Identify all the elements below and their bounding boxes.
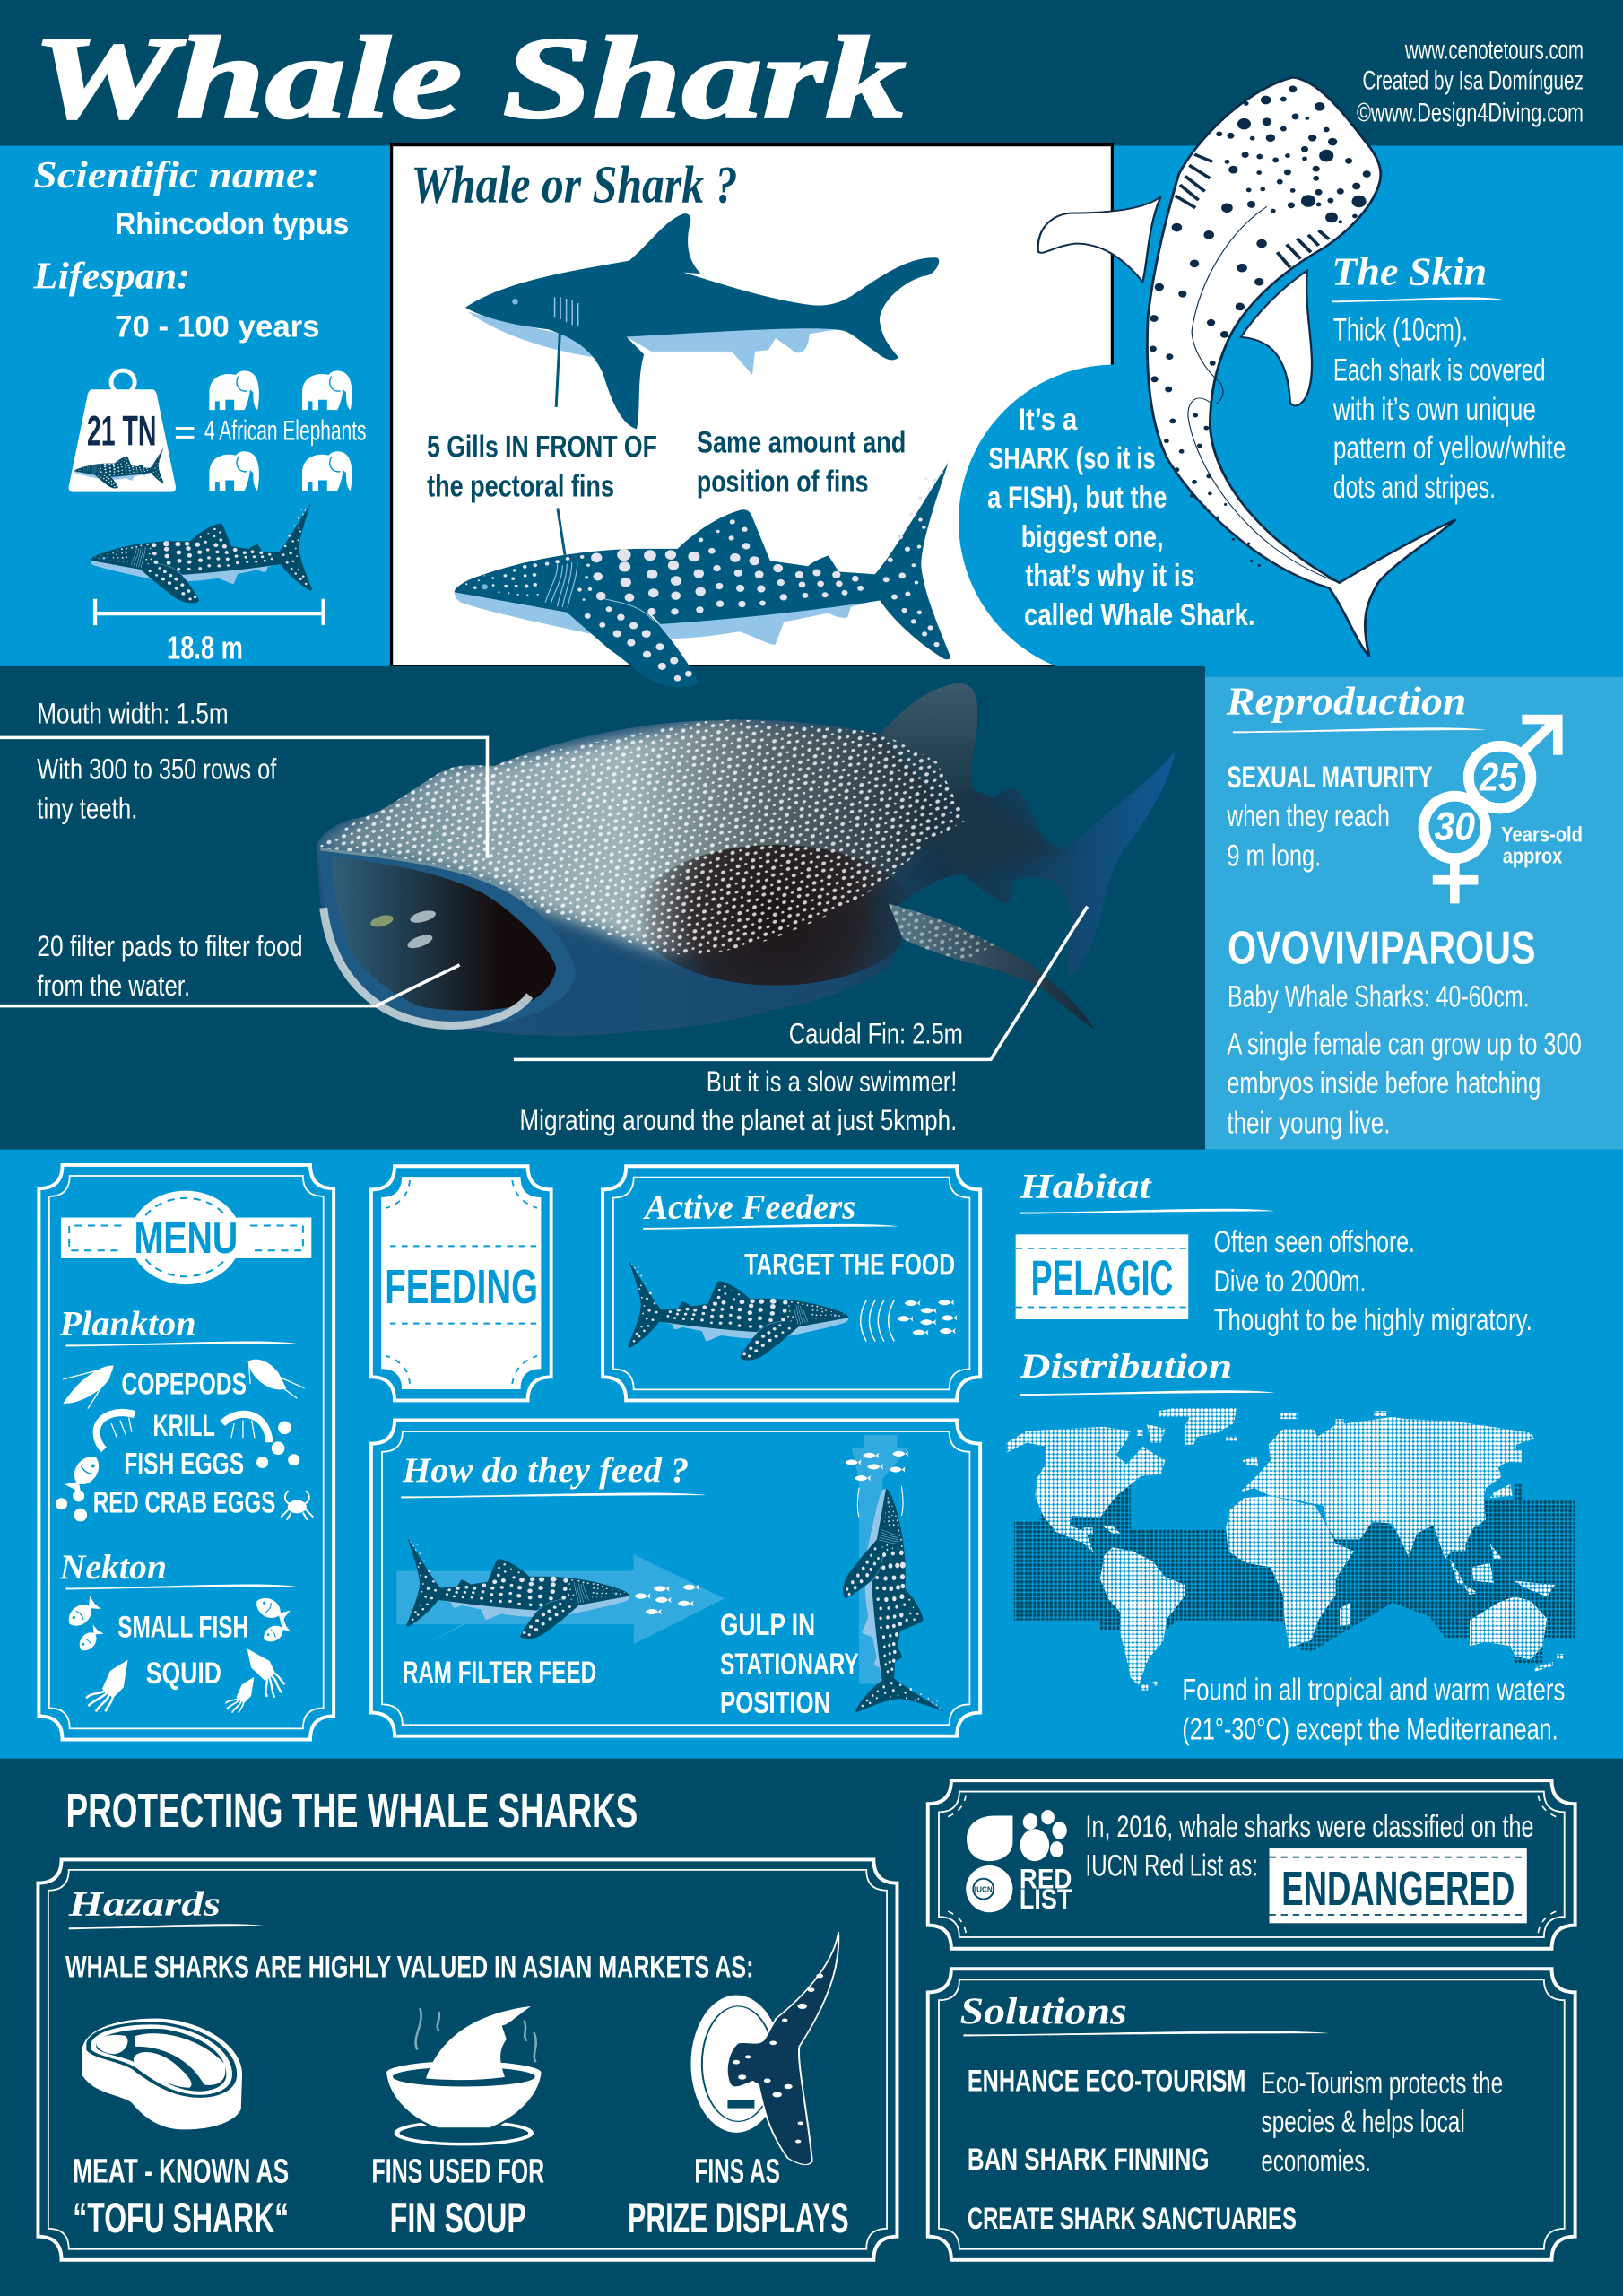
illustration: whale shark [455,463,950,687]
illustration: typical shark [465,213,939,429]
callout: caudal fin: Migrating around the planet at just 5kmph. [519,1103,957,1136]
underline [1020,1209,1275,1214]
solutions list: CREATE SHARK SANCTUARIES [968,2202,1297,2236]
length value: 18.8 m [167,630,243,666]
text block: the skin [1332,250,1566,505]
callout: filter pads: 20 filter pads to filter food [37,929,303,962]
middle blue background [0,1150,1623,1759]
label: TARGET THE FOOD [744,1248,955,1282]
frame [603,1166,980,1400]
heading: Solutions [959,1990,1127,2032]
text block: the skin: The Skin [1332,250,1487,294]
frame [371,1421,980,1736]
panel: menu [39,1165,334,1740]
icon: krill [97,1413,269,1449]
callout: caudal fin: Caudal Fin: 2.5m [789,1017,963,1050]
habitat text: Thought to be highly migratory. [1214,1303,1532,1337]
equals sign [176,429,194,437]
panel: distribution [1007,1347,1575,1747]
panel: hazards [38,1859,897,2260]
callout: it's a shark: SHARK (so it is [988,441,1156,475]
frame [928,1969,1575,2260]
age note: approx [1503,845,1562,868]
heading: Hazards [67,1885,221,1924]
icon: female symbol [1424,796,1486,903]
icon: male symbol: 25 [1479,756,1519,800]
icon: male symbol [1469,715,1563,808]
text block: the skin: dots and stripes. [1333,470,1496,505]
age note: Years-old [1501,823,1583,847]
ovoviviparous heading: OVOVIVIPAROUS [1228,922,1536,974]
heading: nekton: Nekton [59,1548,167,1587]
heading: Active Feeders [642,1187,855,1226]
logo: IUCN red list: IUCN [975,1885,993,1893]
arrow: gulp direction [852,1435,909,1684]
callout: filter pads [0,929,459,1006]
icon: meat [82,2019,242,2129]
panel: habitat [1016,1168,1532,1337]
underline [1020,1390,1275,1396]
panel: red list [928,1780,1575,1949]
icon: weight: 21 TN [87,407,156,455]
icon: elephants [209,370,352,491]
callout: filter pads: from the water. [37,969,190,1002]
lifespan value: 70 - 100 years [115,310,320,344]
frame [38,1859,897,2260]
panel: feeding label: FEEDING [385,1260,538,1314]
sexual maturity text: SEXUAL MATURITY [1227,761,1433,795]
label: fin soup: FIN SOUP [390,2195,526,2242]
underline [65,1342,297,1347]
plankton list: FISH EGGS [124,1448,244,1482]
arrow: gills bottom [558,509,565,555]
upper right strip [1205,666,1623,676]
habitat text [1214,1225,1532,1337]
underline [963,2031,1330,2036]
credits [1357,35,1584,128]
label: prize displays: PRIZE DISPLAYS [628,2195,849,2242]
heading: protecting: PROTECTING THE WHALE SHARKS [65,1784,638,1838]
plankton list [93,1367,275,1520]
menu badge: MENU [135,1214,238,1263]
header band [0,0,1623,145]
sexual maturity text [1227,761,1433,874]
callout: mouth width: With 300 to 350 rows of [37,752,277,786]
illustration: top-down whale shark [1038,77,1456,657]
heading: scientific name: Scientific name: [34,154,319,196]
label: fins [697,425,906,500]
text block: the skin: with it’s own unique [1332,392,1536,427]
label: gills: 5 Gills IN FRONT OF [427,430,657,464]
text block: the skin: Thick (10cm). [1333,313,1468,348]
nekton list [117,1610,248,1691]
nekton list: SQUID [146,1657,221,1691]
callout: it's a shark [987,403,1255,632]
pelagic badge: PELAGIC [1031,1250,1173,1306]
heading: Whale or Shark ? [412,155,738,213]
heading: lifespan: Lifespan: [32,256,190,298]
frame [39,1165,334,1740]
logo: IUCN red list [966,1810,1072,1915]
map: dotted world distribution [1007,1408,1575,1691]
heading: Distribution [1019,1347,1232,1386]
label: prize displays: FINS AS [694,2152,780,2189]
plankton list: RED CRAB EGGS [93,1486,275,1520]
eco-tourism text: species & helps local [1262,2105,1465,2139]
heading underline [1233,727,1487,733]
ovoviviparous text: their young live. [1227,1107,1390,1141]
illustration: ram feeding shark [406,1538,629,1639]
heading: plankton: Plankton [59,1304,196,1343]
photo band background [0,666,1205,1150]
icon: squid [86,1650,291,1713]
blue circle [959,365,1271,678]
callout: mouth width [0,696,487,858]
eco-tourism text: economies. [1262,2144,1371,2179]
label: prize displays [628,2152,849,2242]
weight comparison: 4 African Elephants [204,415,367,447]
label: gulp [720,1608,859,1720]
icon: fish school ram [635,1585,699,1614]
endangered badge: ENDANGERED [1281,1862,1515,1916]
callout: it's a shark: It’s a [1019,403,1078,437]
icon: eggs [56,1421,299,1521]
ovoviviparous text [1227,979,1582,1141]
age note [1501,823,1583,868]
icon: weight [69,370,176,492]
motion lines [857,1486,903,1517]
logo: IUCN red list: RED [1020,1863,1072,1894]
label: meat: “TOFU SHARK“ [73,2195,289,2242]
edge cover [1114,359,1202,666]
intro text: WHALE SHARKS ARE HIGHLY VALUED IN ASIAN MARKETS AS: [65,1951,754,1985]
arrow: gills top [556,319,560,407]
callout: it's a shark: a FISH), but the [987,481,1167,515]
habitat text: Dive to 2000m. [1214,1265,1367,1299]
habitat text: Often seen offshore. [1214,1225,1415,1259]
label: gulp: GULP IN [720,1608,815,1642]
sexual maturity text: 9 m long. [1227,839,1321,874]
nekton list: SMALL FISH [117,1610,248,1644]
white card [392,145,1112,667]
underline [65,1585,297,1590]
icon: fin trophy [690,1932,838,2165]
heading: Habitat [1019,1168,1152,1206]
menu badge [61,1191,311,1284]
species name: Rhincodon typus [115,207,349,241]
frame [928,1780,1575,1949]
callout: it's a shark: biggest one, [1021,520,1164,554]
underline [643,1224,898,1230]
label: meat: MEAT - KNOWN AS [73,2152,289,2189]
icon: crab [281,1491,313,1520]
solutions list [968,2064,1297,2236]
panel: species facts [32,154,367,666]
reproduction panel background [1205,676,1623,1150]
whale shark illustration [91,502,312,603]
illustration: gulp shark [843,1489,944,1712]
illustration: shark [628,1260,848,1361]
arrow: ram direction [396,1549,725,1644]
callout: caudal fin [514,907,1088,1136]
label: ram filter: RAM FILTER FEED [403,1656,596,1690]
icon: copepods [63,1361,304,1409]
icon: fin soup [385,2006,542,2144]
eco-tourism text [1262,2066,1503,2179]
callout: mouth width: Mouth width: 1.5m [37,696,229,729]
label: gulp: STATIONARY [720,1648,859,1682]
bottom dark background [0,1759,1623,2296]
label: gulp: POSITION [720,1686,830,1720]
panel: how do they feed [371,1421,980,1736]
callout: it's a shark: called Whale Shark. [1024,598,1255,632]
label: fins: position of fins [697,465,868,500]
heading: Reproduction [1226,680,1466,724]
sexual maturity text: when they reach [1227,799,1390,833]
endangered badge [1270,1848,1527,1923]
callout: caudal fin: But it is a slow swimmer! [707,1065,957,1098]
logo: IUCN red list: LIST [1020,1883,1072,1915]
photo: whale shark [292,659,1176,1036]
label: gills: the pectoral fins [427,469,614,503]
label: gills [427,430,657,503]
callout: it's a shark: that’s why it is [1025,559,1194,593]
plankton list: KRILL [153,1409,215,1443]
icon: sound arcs [861,1300,894,1342]
underline [69,1924,268,1929]
heading: How do they feed ? [402,1451,689,1490]
underline [401,1492,706,1498]
red list text [1086,1810,1533,1883]
callout: mouth width: tiny teeth. [37,792,137,825]
solutions list: BAN SHARK FINNING [968,2143,1210,2177]
solutions list: ENHANCE ECO-TOURISM [968,2064,1245,2098]
panel: active feeders [603,1166,980,1400]
label: fin soup [372,2152,544,2242]
title: Whale Shark [32,14,906,144]
icon: fish school gulp [846,1451,908,1481]
red list text: IUCN Red List as: [1086,1849,1258,1883]
upper blue background [0,145,1623,675]
plankton list: COPEPODS [121,1367,247,1401]
icon: fish [64,1451,105,1497]
icon: small fish [64,1594,291,1655]
label: fin soup: FINS USED FOR [372,2152,544,2189]
label: meat [73,2152,289,2242]
panel: solutions [928,1969,1575,2260]
length scale [95,599,324,625]
panel: feeding label [371,1166,551,1400]
icon: fish school [897,1300,957,1335]
distribution text [1182,1674,1565,1747]
icon: female symbol: 30 [1434,804,1476,848]
eco-tourism text: Eco-Tourism protects the [1262,2066,1503,2100]
panel: reproduction [1226,680,1583,1141]
label: fins: Same amount and [697,425,906,459]
pelagic badge [1016,1234,1188,1319]
